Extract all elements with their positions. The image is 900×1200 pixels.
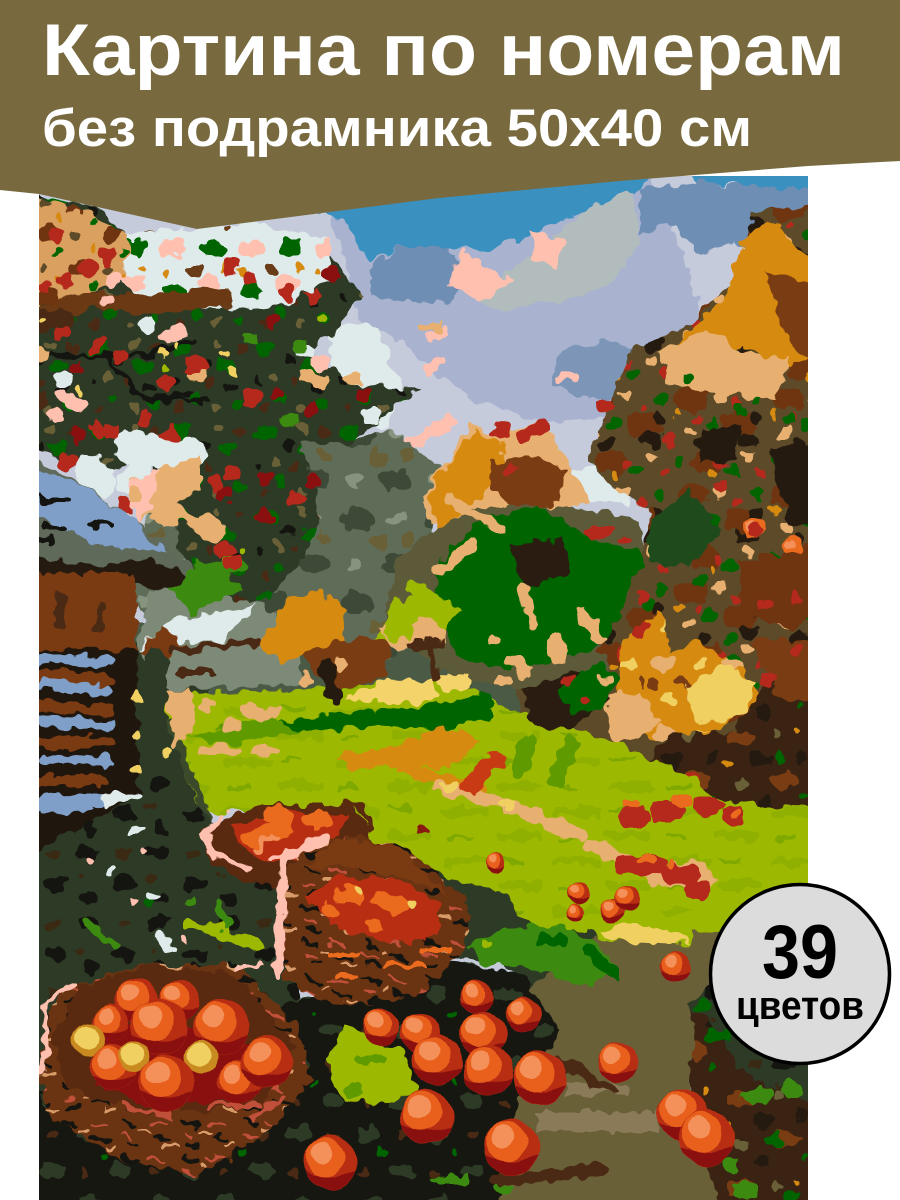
badge: 39 colours: цветов <box>736 984 864 1028</box>
misty background trees <box>130 430 440 670</box>
badge: 39 colours: 39 <box>762 910 838 995</box>
basket: middle <box>278 836 470 1007</box>
house with log wall <box>39 460 302 852</box>
banner <box>0 0 900 229</box>
basket: back <box>203 803 372 890</box>
sky <box>318 176 808 508</box>
lawn <box>165 672 830 950</box>
basket: front <box>40 965 310 1175</box>
foreground shadow and path <box>20 770 830 1200</box>
ground underlay <box>134 622 764 996</box>
title: Картина по номерам <box>42 10 845 91</box>
badge: 39 colours <box>710 884 890 1064</box>
subtitle: без подрамника 50х40 см <box>42 99 752 158</box>
apples <box>72 853 735 1190</box>
right apple tree <box>588 204 808 810</box>
painting: apple orchard <box>39 176 808 1200</box>
centre autumn trees <box>385 420 650 690</box>
left apple tree <box>20 190 418 610</box>
fallen apples on the path <box>625 800 735 890</box>
far autumn trees <box>262 590 620 730</box>
